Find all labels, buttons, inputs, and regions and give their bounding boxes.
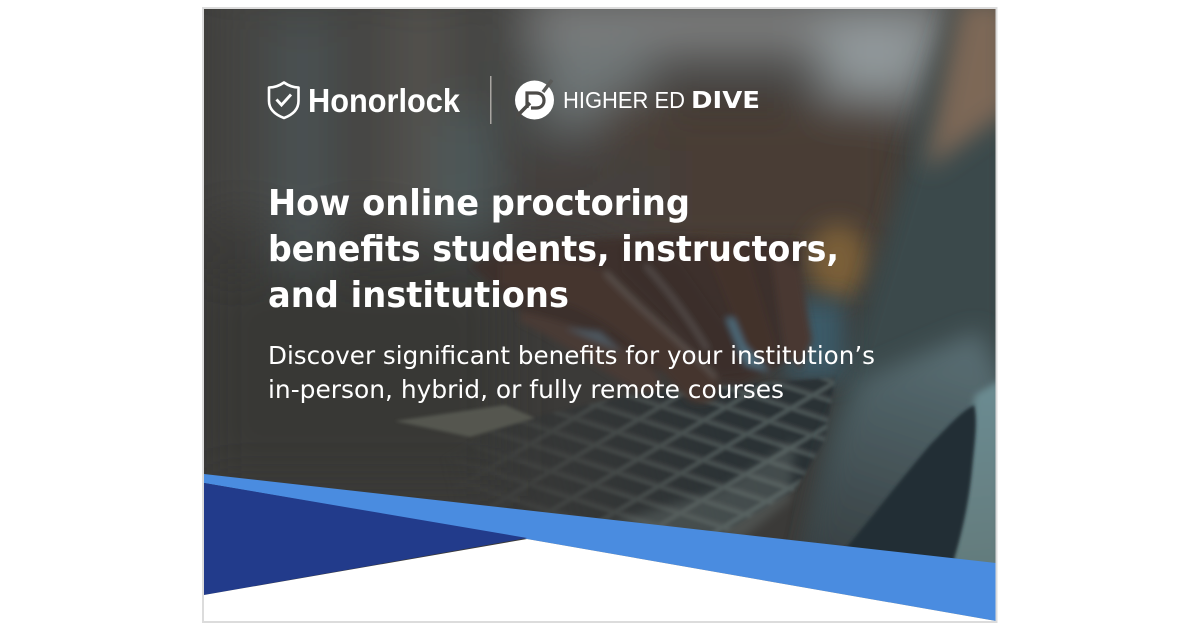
teal glow behind fingers bbox=[785, 300, 845, 380]
wordmark: Dive: DIVE bbox=[691, 88, 760, 114]
trackpad bbox=[395, 405, 535, 437]
photo background: laptop and typing hands bbox=[204, 0, 1010, 630]
wordmark: Higher Ed: HIGHER ED bbox=[563, 87, 685, 113]
blue gap between fingers bbox=[726, 318, 770, 372]
thumb blue highlight bbox=[565, 328, 622, 352]
wordmark: Honorlock: Honorlock bbox=[308, 82, 461, 119]
dark blue wedge bbox=[204, 483, 527, 595]
white lower area bbox=[204, 539, 996, 621]
finger 2 bbox=[620, 245, 745, 375]
back of hand bbox=[470, 235, 800, 385]
dark gap under laptop bbox=[840, 405, 976, 565]
finger 1 highlight bbox=[605, 272, 716, 378]
card border bbox=[203, 8, 996, 622]
keyboard keys bbox=[540, 378, 834, 532]
finger 3 bbox=[732, 312, 774, 372]
blurred warm glow bbox=[808, 224, 868, 300]
title: How online proctoring bbox=[268, 183, 690, 224]
laptop front edge bbox=[616, 444, 796, 535]
logo: Higher Ed Dive bbox=[515, 80, 760, 120]
subtitle: in-person, hybrid, or fully remote courses bbox=[268, 375, 784, 404]
subtitle bbox=[268, 341, 875, 404]
title: and institutions bbox=[268, 275, 569, 316]
finger 2 highlight bbox=[645, 265, 708, 350]
laptop hinge light edge bbox=[953, 380, 996, 563]
infographic card bbox=[202, 7, 998, 623]
icon: Dive circle bbox=[515, 80, 554, 120]
finger 4 bbox=[770, 250, 812, 370]
logo: Honorlock bbox=[269, 82, 461, 119]
finger 1 bbox=[500, 261, 719, 404]
subtitle: Discover significant benefits for your institution’s bbox=[268, 341, 875, 370]
blurred room background bbox=[212, 9, 958, 278]
title bbox=[268, 183, 839, 316]
divider between logos bbox=[490, 76, 492, 124]
light blue diagonal band bbox=[204, 474, 996, 621]
title: benefits students, instructors, bbox=[268, 229, 839, 270]
thumb bbox=[520, 312, 660, 393]
hands bbox=[470, 235, 812, 404]
laptop body bbox=[827, 328, 996, 490]
laptop screen edge bbox=[828, 9, 996, 448]
icon: shield with check bbox=[269, 82, 298, 118]
